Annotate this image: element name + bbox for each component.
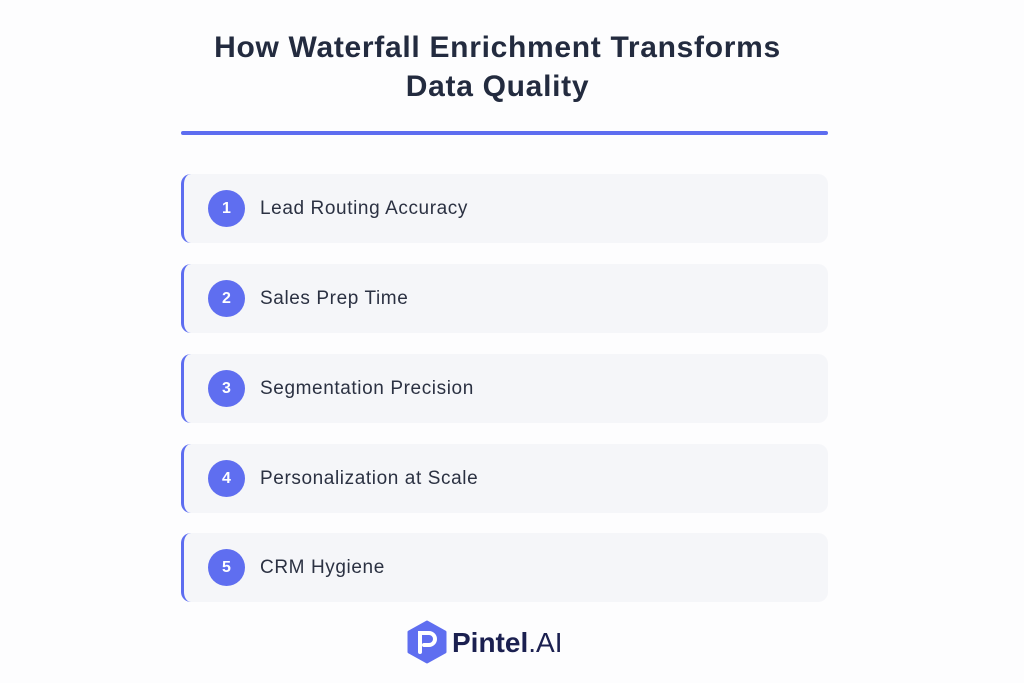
title	[214, 31, 781, 103]
card 2: Sales Prep Time	[260, 288, 408, 309]
card 4: 4	[222, 470, 231, 487]
card 5: 5	[222, 559, 231, 576]
logo	[408, 620, 562, 664]
card 5: CRM Hygiene	[260, 557, 385, 578]
card 2: 2	[222, 290, 231, 307]
card 3: 3	[222, 380, 231, 397]
card 1: 1	[222, 200, 231, 217]
card 2	[181, 264, 828, 333]
card 3	[181, 354, 828, 423]
card 5	[181, 533, 828, 602]
card 4: Personalization at Scale	[260, 468, 478, 489]
card 4	[181, 444, 828, 513]
title: Data Quality	[406, 70, 589, 103]
logo: Pintel.AI	[452, 627, 562, 658]
card 1: Lead Routing Accuracy	[260, 198, 468, 219]
title: How Waterfall Enrichment Transforms	[214, 31, 781, 64]
card 1	[181, 174, 828, 243]
card 3: Segmentation Precision	[260, 378, 474, 399]
